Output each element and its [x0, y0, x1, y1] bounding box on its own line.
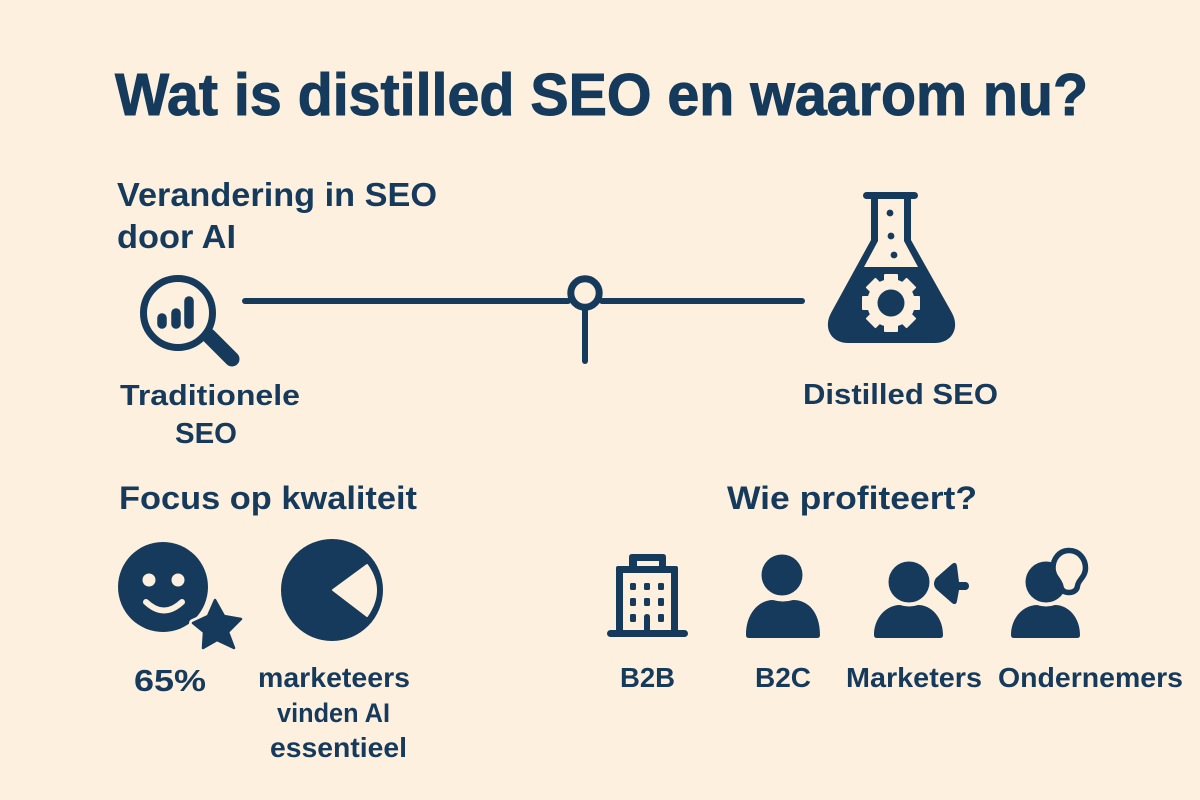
icon: person with megaphone — [874, 562, 969, 638]
label: Traditionele SEO: SEO — [175, 418, 237, 450]
icon: building — [607, 554, 688, 637]
text: marketeers vinden AI essentieel: essentieel — [270, 732, 407, 763]
timeline arrow — [245, 279, 802, 361]
labels: audiences — [620, 662, 1183, 693]
labels: audiences: B2B — [620, 662, 675, 693]
heading: Verandering in SEO door AI: Verandering in SEO — [117, 176, 437, 213]
label: Traditionele SEO: Traditionele — [120, 380, 300, 412]
label: Traditionele SEO — [120, 380, 300, 450]
heading: Verandering in SEO door AI: door AI — [117, 218, 236, 255]
icon: person with lightbulb — [1011, 550, 1086, 638]
labels: audiences: Marketers — [846, 662, 982, 693]
heading: Wie profiteert?: Wie profiteert? — [727, 480, 977, 516]
icon: person B2C — [746, 554, 820, 638]
text: marketeers vinden AI essentieel — [258, 662, 410, 763]
icon: magnifier with bars — [144, 278, 232, 359]
labels: audiences: Ondernemers — [998, 662, 1183, 693]
text: marketeers vinden AI essentieel: marketeers — [258, 662, 410, 693]
icon: smiley with star — [118, 542, 241, 648]
label: Distilled SEO: Distilled SEO — [803, 379, 998, 411]
stat: 65%: 65% — [134, 663, 206, 698]
heading: Verandering in SEO door AI — [117, 176, 437, 255]
icon: flask with gear — [828, 192, 955, 343]
pie chart — [281, 539, 383, 641]
labels: audiences: B2C — [755, 662, 811, 693]
heading: Focus op kwaliteit: Focus op kwaliteit — [119, 480, 417, 516]
title: Wat is distilled SEO en waarom nu? — [115, 62, 1088, 128]
text: marketeers vinden AI essentieel: vinden AI — [277, 698, 390, 728]
